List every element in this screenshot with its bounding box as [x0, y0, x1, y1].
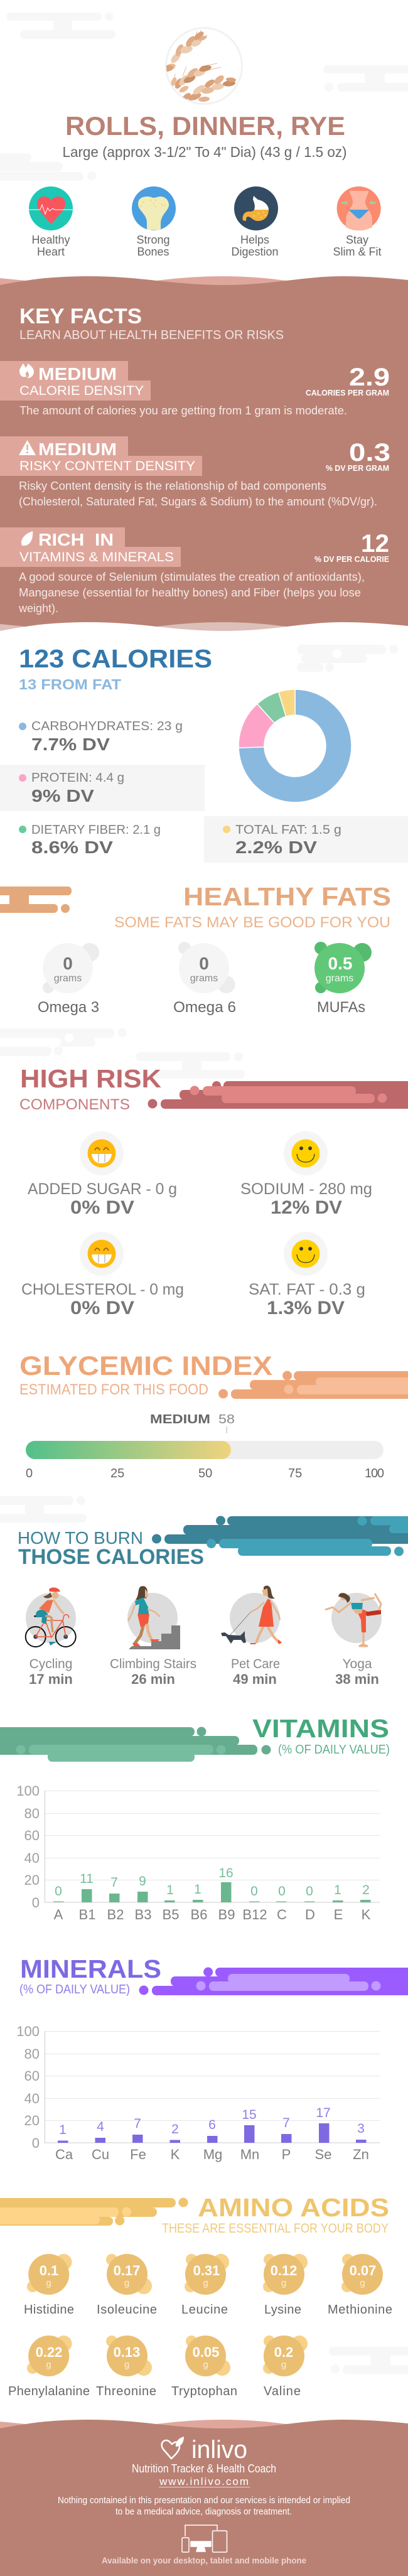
bar chart: vitamins: A	[54, 1907, 63, 1922]
label: medium: MEDIUM	[38, 439, 117, 459]
banner: glycemic index	[218, 1371, 408, 1399]
amino: histidine: Histidine	[24, 2303, 74, 2317]
title: ROLLS, DINNER, RYE	[65, 111, 345, 141]
bar chart: minerals: 1	[59, 2123, 67, 2137]
label: yoga: Yoga	[342, 1657, 372, 1671]
bar chart: vitamins: B6	[191, 1907, 207, 1922]
gauge: 50	[198, 1467, 212, 1480]
banner: burn calories	[152, 1516, 408, 1556]
bar chart: minerals: 60	[24, 2068, 40, 2084]
bar chart: minerals	[16, 2024, 380, 2162]
icon: warning triangle	[19, 440, 36, 455]
amino: threonine	[96, 2336, 156, 2398]
legend: total fat: TOTAL FAT: 1.5 g	[235, 823, 341, 837]
description: weight).	[18, 602, 58, 615]
item: sodium: 12% DV	[271, 1197, 342, 1218]
bar chart: minerals: 4	[97, 2120, 104, 2134]
bar chart: vitamins: 2	[362, 1883, 370, 1897]
label: medium: MEDIUM	[38, 364, 117, 384]
gauge: 75	[288, 1467, 302, 1480]
bar chart: vitamins: B9	[218, 1907, 235, 1922]
activity: climbing stairs	[127, 1586, 180, 1649]
bar chart: minerals: Zn	[353, 2147, 369, 2162]
logo: heart and leaf	[162, 2437, 184, 2459]
panel: glycemic index	[19, 1351, 408, 1480]
amino: valine: 0.2	[274, 2344, 293, 2360]
item: cholesterol: CHOLESTEROL - 0 mg	[21, 1281, 184, 1298]
fact: risky content density	[0, 436, 390, 508]
banner: healthy fats	[0, 887, 72, 913]
bar chart: minerals: 2	[171, 2122, 179, 2137]
heading: vitamins: VITAMINS	[252, 1714, 389, 1743]
subheading: minerals: (% OF DAILY VALUE)	[19, 1983, 130, 1997]
label: stay slim and fit: Stay	[346, 234, 368, 246]
bar chart: vitamins: 60	[24, 1828, 40, 1843]
icon: strong bones	[132, 186, 176, 230]
gauge: MEDIUM	[150, 1413, 210, 1426]
website: www.inlivo.com	[159, 2476, 249, 2487]
amino: threonine: 0.13	[114, 2344, 140, 2360]
amino: isoleucine: g	[124, 2278, 129, 2288]
amino: histidine: 0.1	[40, 2263, 58, 2278]
label: stay slim and fit: Slim & Fit	[333, 245, 382, 258]
bar chart: vitamins: 100	[16, 1783, 40, 1799]
bar chart: vitamins: 40	[24, 1850, 40, 1866]
bar chart: vitamins: B3	[135, 1907, 151, 1922]
bar chart: minerals: 17	[316, 2106, 331, 2120]
icon: flame	[19, 364, 34, 378]
bar chart: vitamins: B12	[242, 1907, 267, 1922]
icon: stay slim and fit	[337, 186, 381, 230]
fact: rich in vitamins and minerals	[0, 527, 389, 615]
label: strong bones: Bones	[137, 245, 169, 258]
bar chart: vitamins: 9	[139, 1874, 146, 1889]
amino: valine: g	[281, 2359, 286, 2370]
bar chart: minerals: 0	[32, 2135, 40, 2151]
card: omega 6: grams	[190, 973, 218, 984]
activity: yoga	[325, 1593, 382, 1646]
label: rich in: RICH IN	[38, 530, 114, 549]
bar chart: vitamins: 16	[218, 1866, 234, 1880]
label: cycling: Cycling	[30, 1657, 72, 1671]
label: yoga: 38 min	[335, 1671, 379, 1687]
amino: lysine: Lysine	[264, 2303, 301, 2317]
amino: methionine: g	[360, 2278, 365, 2288]
panel: key facts	[0, 276, 408, 637]
item: saturated fat: 1.3% DV	[267, 1298, 345, 1318]
gauge: 100	[365, 1467, 384, 1480]
label: pet care: Pet Care	[231, 1657, 280, 1671]
bar chart: minerals: K	[171, 2147, 180, 2162]
panel: high risk components	[19, 1064, 408, 1318]
unit: calories per gram: CALORIES PER GRAM	[306, 388, 389, 397]
label: strong bones: Strong	[136, 234, 170, 246]
gauge: 58	[218, 1413, 235, 1426]
heading: key facts: KEY FACTS	[19, 304, 142, 328]
amino: tryptophan	[171, 2336, 237, 2398]
legend: protein: 9% DV	[31, 786, 94, 806]
description: A good source of Selenium (stimulates the creation of antioxidants),	[19, 571, 365, 583]
legend: dietary fiber: DIETARY FIBER: 2.1 g	[31, 823, 161, 837]
serving size: Large (approx 3-1/2" To 4" Dia) (43 g / 1.5 oz)	[63, 144, 346, 160]
amino: lysine: g	[281, 2278, 286, 2288]
bar chart: vitamins: K	[362, 1907, 371, 1922]
bar chart: minerals: Mg	[203, 2147, 222, 2162]
banner: amino acids	[0, 2197, 188, 2226]
availability note: Available on your desktop, tablet and mobile phone	[102, 2555, 306, 2565]
bar chart: vitamins: B2	[107, 1907, 124, 1922]
card: omega 6: Omega 6	[173, 999, 236, 1016]
label: vitamins and minerals: VITAMINS & MINERALS	[19, 550, 174, 564]
bar chart: minerals: 100	[16, 2024, 40, 2039]
value: 2.9: 2.9	[349, 364, 390, 391]
legend: carbohydrates: CARBOHYDRATES: 23 g	[31, 719, 183, 733]
heading: minerals: MINERALS	[20, 1954, 161, 1983]
label: pet care: 49 min	[233, 1671, 277, 1687]
amino: lysine	[263, 2254, 308, 2317]
subheading: key facts: LEARN ABOUT HEALTH BENEFITS OR RISKS	[19, 328, 284, 342]
amino: phenylalanine	[8, 2336, 90, 2398]
legend: total fat: 2.2% DV	[235, 838, 317, 857]
amino: histidine: g	[46, 2278, 51, 2288]
legend: dietary fiber: 8.6% DV	[31, 838, 113, 857]
amino: phenylalanine: g	[46, 2359, 51, 2370]
bar chart: minerals: 40	[24, 2091, 40, 2106]
gauge: 25	[110, 1467, 124, 1480]
legend: protein: PROTEIN: 4.4 g	[31, 771, 124, 785]
bar chart: minerals: Fe	[130, 2147, 146, 2162]
panel: calories	[0, 644, 408, 863]
panel: how to burn those calories	[18, 1516, 408, 1687]
card: omega 3: grams	[54, 973, 82, 984]
label: helps digestion: Helps	[240, 234, 269, 246]
amino: leucine: 0.31	[193, 2263, 220, 2278]
gauge	[26, 1413, 384, 1480]
card: mufas	[314, 942, 372, 1016]
legend: carbohydrates	[19, 719, 183, 754]
value: 0.3: 0.3	[349, 439, 390, 466]
label: climbing stairs: 26 min	[131, 1671, 175, 1687]
item: saturated fat	[249, 1232, 365, 1318]
benefits row	[29, 186, 382, 258]
panel: footer	[0, 2420, 408, 2576]
label: climbing stairs: Climbing Stairs	[110, 1657, 196, 1671]
label: healthy heart: Heart	[37, 245, 65, 258]
subheading: vitamins: (% OF DAILY VALUE)	[278, 1743, 390, 1757]
item: added sugar: 0% DV	[70, 1197, 134, 1218]
panel: amino acids	[0, 2193, 392, 2398]
icon: healthy heart	[29, 186, 73, 230]
amino: phenylalanine: 0.22	[36, 2344, 62, 2360]
heading: glycemic index: GLYCEMIC INDEX	[19, 1351, 272, 1381]
banner: minerals	[139, 1968, 408, 1995]
amino: methionine	[328, 2254, 392, 2317]
bar chart: vitamins: 11	[80, 1872, 94, 1886]
label: cycling: 17 min	[29, 1671, 73, 1687]
bar chart: vitamins: 20	[24, 1872, 40, 1888]
amino: methionine: Methionine	[328, 2303, 392, 2317]
icon: leaf	[21, 531, 33, 546]
card: mufas: 0.5	[328, 954, 352, 973]
amino: threonine: Threonine	[96, 2385, 156, 2398]
banner: vitamins	[0, 1727, 271, 1762]
card: omega 3	[38, 943, 99, 1016]
bar chart: vitamins	[16, 1783, 380, 1922]
card: omega 6	[173, 942, 236, 1016]
legend: carbohydrates: 7.7% DV	[31, 735, 110, 754]
image: wheat ears	[161, 28, 242, 104]
bar chart: minerals: Cu	[92, 2147, 109, 2162]
bar chart: vitamins: 0	[55, 1884, 62, 1899]
bar chart: vitamins: E	[334, 1907, 343, 1922]
description: Risky Content density is the relationship of bad components	[19, 480, 326, 492]
item: cholesterol	[21, 1232, 184, 1318]
legend: total fat	[204, 816, 408, 863]
item: sodium: SODIUM - 280 mg	[240, 1180, 372, 1198]
amino: tryptophan: Tryptophan	[171, 2385, 237, 2398]
disclaimer: to be a medical advice, diagnosis or treatment.	[115, 2507, 292, 2517]
description: (Cholesterol, Saturated Fat, Sugars & Sodium) to the amount (%DV/gr).	[19, 495, 377, 508]
heading: how to burn: HOW TO BURN	[18, 1528, 143, 1548]
bar chart: minerals: 3	[357, 2121, 365, 2136]
bar chart: vitamins: 1	[334, 1883, 341, 1897]
bar chart: minerals: 20	[24, 2113, 40, 2128]
bar chart: minerals: 15	[242, 2108, 257, 2122]
activity: cycling	[26, 1588, 76, 1647]
amino: histidine	[24, 2254, 74, 2317]
tagline: Nutrition Tracker & Health Coach	[132, 2462, 276, 2475]
heading: 123 calories: 123 CALORIES	[19, 644, 212, 673]
amino: tryptophan: 0.05	[193, 2344, 219, 2360]
bar chart: minerals: 6	[208, 2118, 216, 2132]
amino: methionine: 0.07	[350, 2263, 376, 2278]
item: added sugar	[28, 1131, 177, 1218]
heading: high risk: HIGH RISK	[20, 1064, 161, 1093]
amino: isoleucine	[97, 2254, 157, 2317]
amino: valine	[263, 2336, 308, 2398]
card: omega 6: 0	[199, 954, 209, 973]
bar chart: vitamins: 0	[306, 1884, 313, 1899]
label: helps digestion: Digestion	[231, 245, 279, 258]
bar chart: minerals: Mn	[240, 2147, 259, 2162]
item: sodium	[240, 1131, 372, 1218]
fact: calorie density	[0, 361, 390, 417]
item: added sugar: ADDED SUGAR - 0 g	[28, 1180, 177, 1198]
panel: healthy fats	[0, 882, 391, 1016]
legend: protein	[0, 765, 205, 811]
heading: those calories: THOSE CALORIES	[18, 1545, 204, 1569]
description: Manganese (essential for healthy bones) and Fiber (helps you lose	[19, 586, 361, 599]
disclaimer: Nothing contained in this presentation and our services is intended or implied	[58, 2496, 350, 2506]
bar chart: vitamins: B5	[163, 1907, 179, 1922]
amino: threonine: g	[124, 2359, 129, 2370]
label: healthy heart: Healthy	[31, 234, 70, 246]
amino: isoleucine: 0.17	[114, 2263, 140, 2278]
bar chart: minerals: 80	[24, 2046, 40, 2062]
icon: devices	[182, 2525, 227, 2552]
heading: amino acids: AMINO ACIDS	[198, 2193, 389, 2222]
card: mufas: MUFAs	[317, 999, 365, 1016]
bar chart: vitamins: C	[277, 1907, 287, 1922]
amino: valine: Valine	[264, 2385, 301, 2398]
bar chart: vitamins: 0	[278, 1884, 286, 1899]
bar chart: minerals: Se	[315, 2147, 331, 2162]
bar chart: vitamins: 1	[166, 1883, 174, 1897]
bar chart: vitamins: 1	[194, 1882, 201, 1897]
item: saturated fat: SAT. FAT - 0.3 g	[249, 1281, 365, 1298]
bar chart: vitamins: 80	[24, 1806, 40, 1821]
bar chart: vitamins: B1	[79, 1907, 95, 1922]
subheading: estimated: ESTIMATED FOR THIS FOOD	[19, 1381, 208, 1398]
bar chart: vitamins: 7	[110, 1875, 118, 1890]
bar chart: vitamins: 0	[32, 1895, 40, 1910]
bar chart: minerals: 7	[134, 2116, 141, 2131]
bar chart: vitamins: D	[305, 1907, 315, 1922]
icon: helps digestion	[234, 186, 278, 230]
amino: leucine	[181, 2254, 229, 2317]
legend: dietary fiber	[19, 823, 161, 857]
unit: percent dv per calorie: % DV PER CALORIE	[314, 554, 389, 564]
amino: lysine: 0.12	[271, 2263, 297, 2278]
panel: vitamins	[0, 1714, 390, 1922]
subheading: healthy fats: SOME FATS MAY BE GOOD FOR YOU	[114, 914, 390, 931]
bar chart: minerals: 7	[282, 2116, 290, 2130]
bar chart: minerals: P	[282, 2147, 291, 2162]
subheading: components: COMPONENTS	[19, 1096, 130, 1113]
donut chart	[239, 689, 352, 802]
unit: percent dv per gram: % DV PER GRAM	[326, 463, 389, 473]
amino: isoleucine: Isoleucine	[97, 2303, 157, 2317]
activity: pet care	[221, 1586, 282, 1644]
label: calorie density: CALORIE DENSITY	[19, 384, 144, 398]
banner: high risk	[148, 1081, 408, 1109]
value: 12: 12	[361, 530, 389, 558]
card: omega 3: Omega 3	[38, 999, 99, 1016]
bar chart: vitamins: 0	[250, 1884, 258, 1899]
amino: leucine: g	[203, 2278, 208, 2288]
label: risky content density: RISKY CONTENT DENSITY	[19, 459, 195, 473]
amino: tryptophan: g	[203, 2359, 208, 2370]
brand name: inlivo	[191, 2436, 247, 2464]
amino: leucine: Leucine	[181, 2303, 228, 2317]
card: mufas: grams	[326, 973, 353, 984]
heading: healthy fats: HEALTHY FATS	[183, 882, 391, 911]
bar chart: minerals: Ca	[55, 2147, 73, 2162]
item: cholesterol: 0% DV	[70, 1298, 134, 1318]
gauge: 0	[26, 1467, 33, 1480]
subheading: from fat: 13 FROM FAT	[19, 676, 121, 693]
amino: phenylalanine: Phenylalanine	[8, 2385, 90, 2398]
description: The amount of calories you are getting from 1 gram is moderate.	[19, 404, 347, 417]
panel: minerals	[16, 1954, 408, 2162]
card: omega 3: 0	[63, 954, 73, 973]
